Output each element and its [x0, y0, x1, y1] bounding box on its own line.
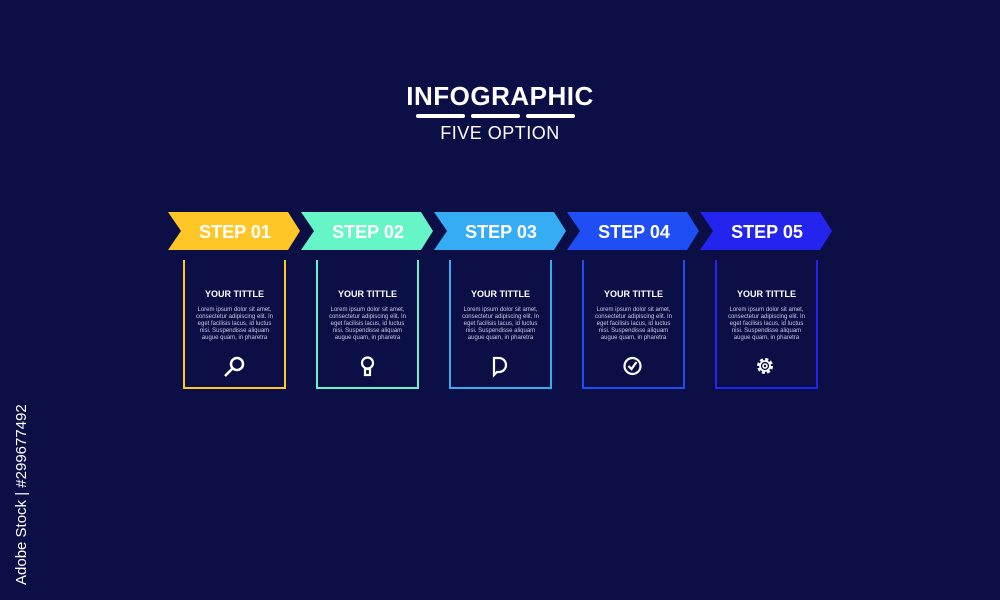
- card: step 02: [317, 260, 418, 388]
- card: step 05: eget facilisis lacus, id luctus: [730, 321, 803, 327]
- card: step 02: YOUR TITTLE: [338, 289, 397, 299]
- title: [406, 81, 594, 143]
- card: step 05: consectetur adipiscing elit. In: [728, 314, 805, 320]
- card: step 04: [583, 260, 684, 388]
- card: step 05: nisi. Suspendisse aliquam: [732, 328, 801, 334]
- icon: magnifier: [225, 358, 243, 376]
- arrow: step 04: STEP 04: [598, 222, 670, 242]
- card: step 03: Lorem ipsum dolor sit amet,: [463, 307, 538, 313]
- card: step 05: [716, 260, 817, 388]
- card: step 03: eget facilisis lacus, id luctus: [464, 321, 537, 327]
- icon: document: [494, 358, 506, 375]
- card: step 01: YOUR TITTLE: [205, 289, 264, 299]
- card: step 04: nisi. Suspendisse aliquam: [599, 328, 668, 334]
- icon: gear: [758, 360, 772, 372]
- card: step 05: Lorem ipsum dolor sit amet,: [729, 307, 804, 313]
- card: step 03: consectetur adipiscing elit. In: [462, 314, 539, 320]
- card: step 01: consectetur adipiscing elit. In: [196, 314, 273, 320]
- card: step 05: augue quam, in pharetra: [734, 335, 800, 341]
- arrow: step 03: [434, 212, 566, 250]
- icon: light bulb: [362, 358, 373, 375]
- card: step 04: consectetur adipiscing elit. In: [595, 314, 672, 320]
- card: step 03: [450, 260, 551, 388]
- card: step 03: augue quam, in pharetra: [468, 335, 534, 341]
- card: step 02: Lorem ipsum dolor sit amet,: [330, 307, 405, 313]
- step 3: [434, 212, 566, 388]
- card: step 01: nisi. Suspendisse aliquam: [200, 328, 269, 334]
- title: FIVE OPTION: [440, 123, 560, 143]
- card: step 02: augue quam, in pharetra: [335, 335, 401, 341]
- card: step 05: YOUR TITTLE: [737, 289, 796, 299]
- card: step 01: [184, 260, 285, 388]
- arrow: step 02: STEP 02: [332, 222, 404, 242]
- arrow: step 05: STEP 05: [731, 222, 803, 242]
- card: step 03: nisi. Suspendisse aliquam: [466, 328, 535, 334]
- arrow: step 02: [301, 212, 433, 250]
- card: step 01: augue quam, in pharetra: [202, 335, 268, 341]
- side credit: Adobe Stock | #299677492: [13, 404, 30, 585]
- card: step 02: consectetur adipiscing elit. In: [329, 314, 406, 320]
- card: step 04: eget facilisis lacus, id luctus: [597, 321, 670, 327]
- card: step 01: Lorem ipsum dolor sit amet,: [197, 307, 272, 313]
- title: INFOGRAPHIC: [406, 81, 594, 111]
- card: step 01: eget facilisis lacus, id luctus: [198, 321, 271, 327]
- step 5: [700, 212, 832, 388]
- step 4: [567, 212, 699, 388]
- arrow: step 03: STEP 03: [465, 222, 537, 242]
- icon: check clock: [624, 358, 640, 374]
- step 2: [301, 212, 433, 388]
- card: step 04: augue quam, in pharetra: [601, 335, 667, 341]
- card: step 03: YOUR TITTLE: [471, 289, 530, 299]
- arrow: step 01: [168, 212, 300, 250]
- step 1: [168, 212, 300, 388]
- card: step 02: eget facilisis lacus, id luctus: [331, 321, 404, 327]
- arrow: step 01: STEP 01: [199, 222, 271, 242]
- arrow: step 04: [567, 212, 699, 250]
- card: step 02: nisi. Suspendisse aliquam: [333, 328, 402, 334]
- card: step 04: YOUR TITTLE: [604, 289, 663, 299]
- card: step 04: Lorem ipsum dolor sit amet,: [596, 307, 671, 313]
- arrow: step 05: [700, 212, 832, 250]
